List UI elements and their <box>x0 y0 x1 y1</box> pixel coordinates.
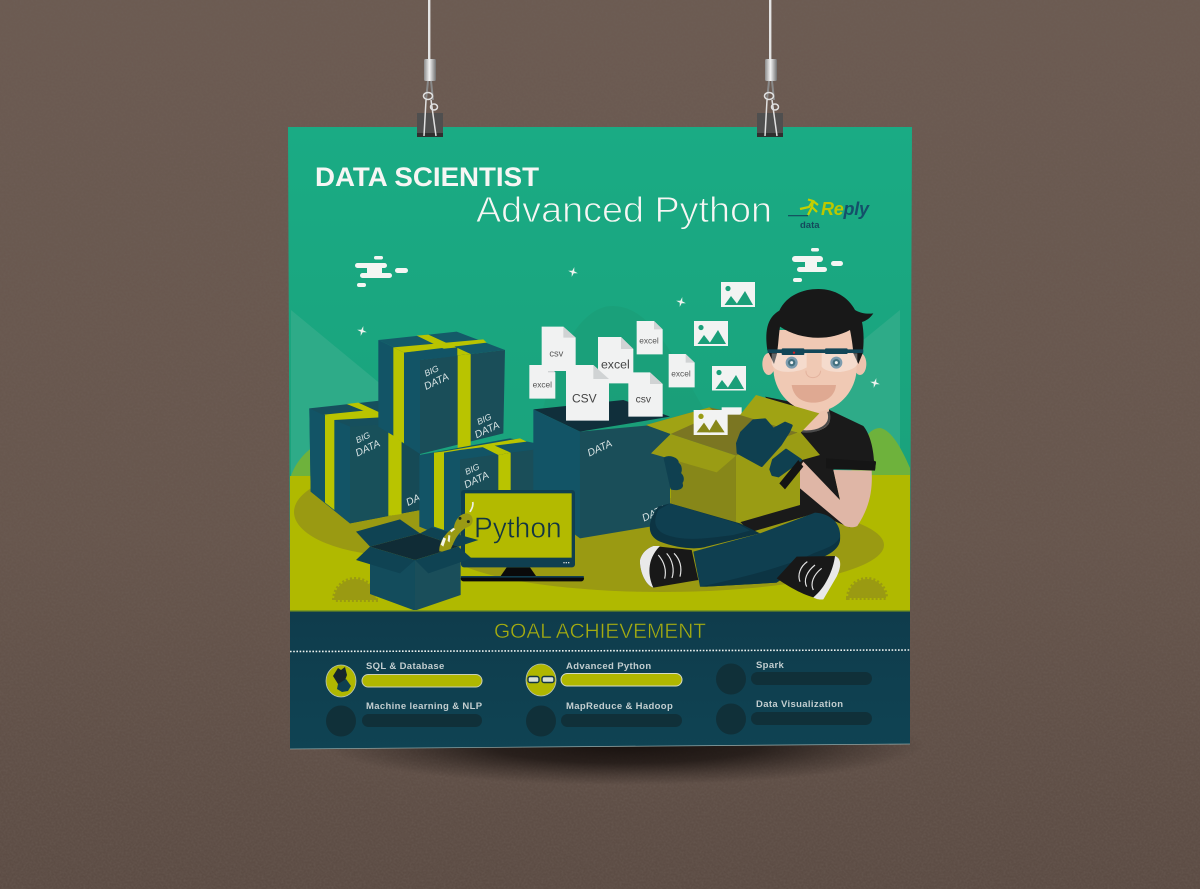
file: csv right <box>628 372 663 417</box>
left big data boxes <box>309 332 537 543</box>
file: csv large <box>566 365 609 421</box>
box back flaps <box>356 519 478 547</box>
snake <box>439 502 473 552</box>
person with open box <box>640 289 876 599</box>
heading: advanced python: Advanced Python <box>476 189 772 230</box>
monitor screen <box>465 493 572 558</box>
shirt sleeve band <box>826 458 876 471</box>
file: csv right: csv <box>636 394 652 405</box>
ground shadows <box>294 468 886 600</box>
file: excel small left: excel <box>533 380 552 390</box>
poster <box>288 127 912 749</box>
box top: DATA <box>423 372 451 393</box>
data box <box>533 400 670 538</box>
box left: BIG <box>354 430 372 445</box>
skill: machine learning and nlp <box>326 701 483 736</box>
small open box with snake <box>356 502 478 611</box>
logo: data reply: Reply <box>821 199 870 219</box>
sparkle stars <box>356 266 881 389</box>
skill: spark: Spark <box>756 660 785 671</box>
mouth <box>792 385 836 403</box>
collar <box>802 412 829 432</box>
glasses led <box>793 351 795 354</box>
monitor frame <box>461 490 575 567</box>
image icons <box>694 282 755 390</box>
cloud right <box>792 248 843 282</box>
box left: DA <box>405 493 422 509</box>
ground edge line <box>290 610 910 612</box>
box top: BIG <box>475 411 493 427</box>
glasses lenses <box>772 353 857 372</box>
file: excel small left <box>529 365 555 399</box>
box top: DATA <box>473 420 502 441</box>
monitor text: Python <box>474 512 562 544</box>
box front <box>419 438 537 543</box>
poster shadow <box>325 705 925 785</box>
monitor <box>461 490 584 581</box>
monitor stand <box>461 567 584 581</box>
logo: data reply <box>788 199 870 231</box>
box front: BIG <box>463 461 481 477</box>
skill: data visualization: Data Visualization <box>756 699 843 710</box>
goal achievement panel <box>290 610 910 749</box>
arm <box>790 462 872 527</box>
file: csv: csv <box>549 348 564 358</box>
skill: data visualization <box>716 699 872 734</box>
neck <box>800 403 830 432</box>
skill: sql and database <box>326 661 482 697</box>
poster green background <box>288 127 912 612</box>
skill: mapreduce and hadoop: MapReduce & Hadoop <box>566 701 673 712</box>
open box <box>646 395 820 523</box>
file: excel top: excel <box>639 335 659 345</box>
shoe right <box>777 556 840 599</box>
eyes <box>786 357 842 369</box>
file: excel top <box>637 321 663 354</box>
panel background <box>290 611 910 749</box>
monitor buttons <box>563 562 569 563</box>
data box: DATA <box>641 503 669 524</box>
data box: DATA <box>586 438 614 459</box>
gloves <box>665 420 801 489</box>
box body <box>370 560 415 611</box>
file: csv large: CSV <box>572 392 597 406</box>
box left: DATA <box>354 438 382 459</box>
watch strap <box>779 460 803 489</box>
skill: mapreduce and hadoop <box>526 701 682 736</box>
box left <box>309 401 422 523</box>
image icon 3 <box>712 366 746 390</box>
image icon 2 <box>694 321 728 346</box>
dotted divider <box>290 650 910 652</box>
background hills and light triangles <box>291 306 910 480</box>
box front: DATA <box>463 470 491 491</box>
heading: data scientist: DATA SCIENTIST <box>315 162 540 192</box>
logo: data reply: data <box>800 220 820 231</box>
shirt <box>740 397 876 532</box>
box front flaps <box>356 547 472 573</box>
hair <box>766 289 873 364</box>
skill: machine learning and nlp: Machine learning & NLP <box>366 701 483 712</box>
image icon 1 <box>721 282 755 307</box>
file: excel right: excel <box>671 369 691 379</box>
file: excel right <box>669 354 695 387</box>
box top <box>378 332 505 454</box>
file: excel large: excel <box>601 357 630 371</box>
image in box back <box>722 407 742 415</box>
legs <box>650 503 840 587</box>
box inside <box>370 533 458 560</box>
hanging clip right <box>757 0 783 137</box>
file: excel large <box>598 337 633 383</box>
files and data box <box>529 321 695 538</box>
shoe left <box>640 546 698 588</box>
skill: advanced python: Advanced Python <box>566 661 652 672</box>
nose <box>806 371 821 378</box>
head <box>762 289 873 412</box>
image in box front <box>694 410 728 435</box>
skill: advanced python <box>526 661 682 696</box>
file: csv <box>542 327 576 371</box>
skill: sql and database: SQL & Database <box>366 661 445 672</box>
ground <box>290 475 910 612</box>
cloud left <box>355 256 408 287</box>
box top: BIG <box>423 363 441 378</box>
skill: spark <box>716 660 872 694</box>
hanging clip left <box>417 0 443 137</box>
goal heading: GOAL ACHIEVEMENT <box>494 620 706 643</box>
bottom edge highlight <box>290 744 910 749</box>
glasses frame <box>768 348 863 355</box>
